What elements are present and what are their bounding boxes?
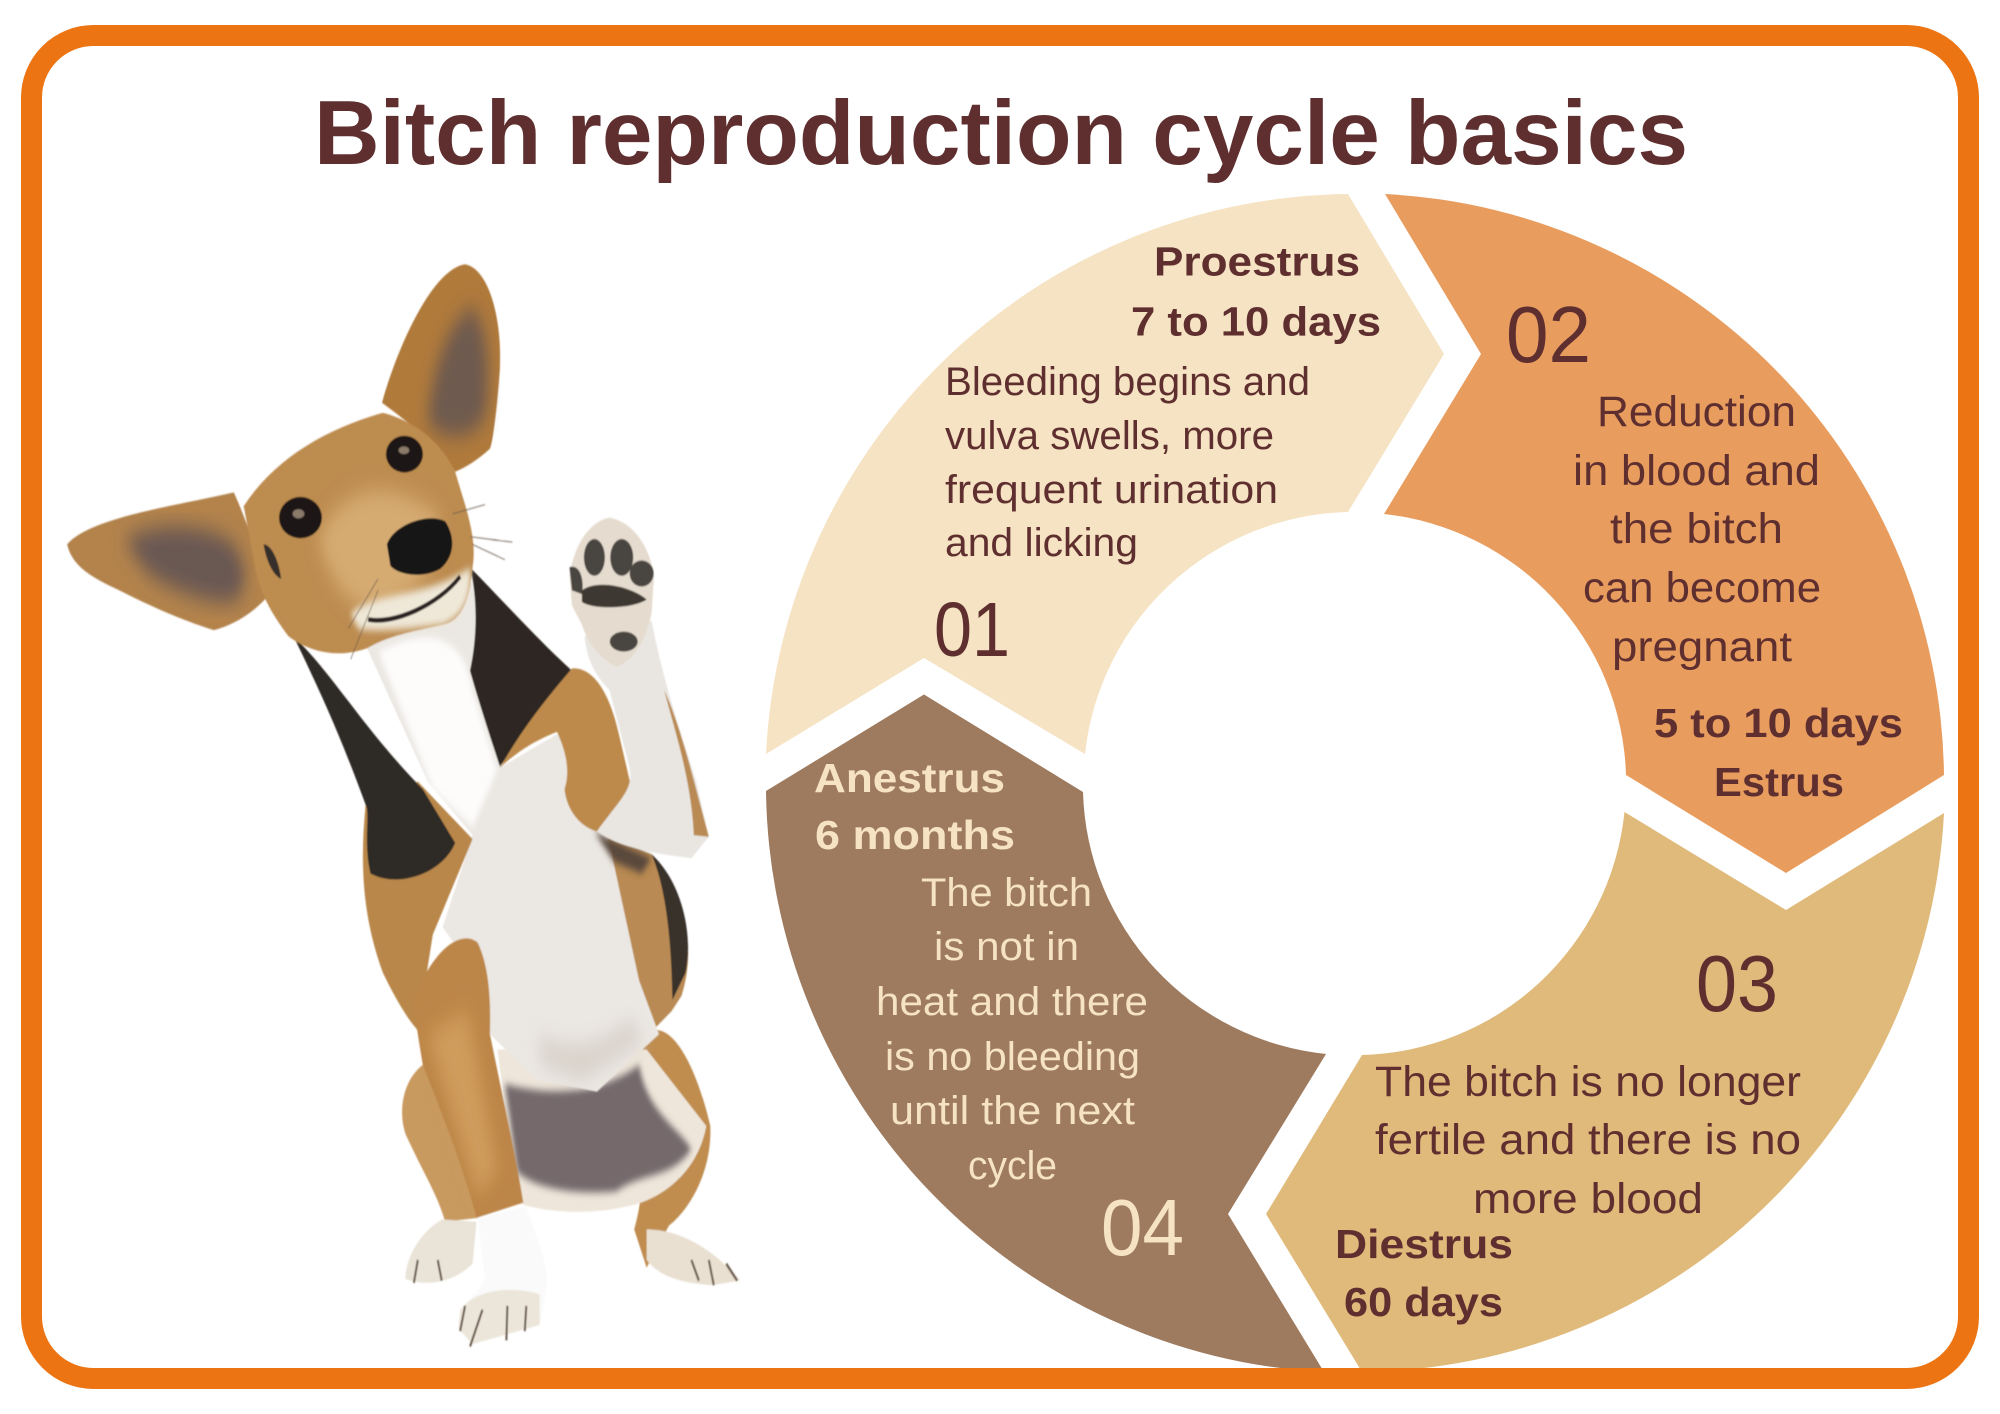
tan shoulder under black (500, 668, 632, 831)
segment 01 Proestrus: 01 (934, 587, 1010, 673)
paw (570, 518, 654, 667)
segment 02 Estrus: pregnant (1612, 623, 1792, 671)
mouth (368, 577, 460, 620)
segment 01 Proestrus: Proestrus (1154, 238, 1360, 284)
segment 04 Anestrus: 04 (1101, 1183, 1184, 1272)
far rear leg (634, 1030, 710, 1268)
raised leg (570, 518, 709, 858)
head (244, 413, 474, 653)
segment 03 Diestrus (1266, 812, 1944, 1372)
segment 04 Anestrus: heat and there (876, 980, 1148, 1024)
segment 03 Diestrus: The bitch is no longer (1375, 1058, 1801, 1106)
whiskers (348, 505, 512, 659)
segment 04 Anestrus: cycle (968, 1144, 1057, 1188)
segment 02 Estrus: Estrus (1714, 759, 1844, 805)
segment 02 Estrus: the bitch (1610, 505, 1783, 553)
segment 03 Diestrus: 60 days (1344, 1279, 1503, 1325)
segment 04 Anestrus: is not in (934, 925, 1079, 969)
front white foot (460, 1206, 547, 1342)
front leg (413, 938, 523, 1218)
segment 01 Proestrus: vulva swells, more (945, 414, 1274, 458)
segment 04 Anestrus: The bitch (921, 871, 1092, 915)
rear back (604, 835, 688, 1042)
segment 02 Estrus: 5 to 10 days (1654, 700, 1903, 746)
nose (387, 518, 452, 575)
segment 02 Estrus: 02 (1506, 290, 1591, 379)
shadow under raised leg (594, 831, 652, 873)
segment 04 Anestrus: Anestrus (814, 755, 1005, 801)
right eye (386, 436, 423, 472)
right ear (382, 264, 500, 472)
belly underside (497, 1049, 706, 1212)
black neck patch (293, 636, 455, 879)
segment 02 Estrus: in blood and (1573, 447, 1820, 495)
segment 03 Diestrus: 03 (1696, 939, 1778, 1028)
left shoulder (363, 782, 473, 1030)
near-side rear leg (402, 1065, 478, 1222)
upper back black (470, 567, 572, 766)
segment 01 Proestrus: and licking (945, 521, 1138, 565)
segment 02 Estrus: can become (1583, 564, 1821, 612)
segment 01 Proestrus: 7 to 10 days (1131, 298, 1381, 344)
segment 04 Anestrus: is no bleeding (885, 1035, 1140, 1079)
icon: dog raising paw (67, 264, 740, 1346)
segment 04 Anestrus: until the next (890, 1089, 1135, 1133)
segment 03 Diestrus: Diestrus (1335, 1221, 1513, 1267)
title: Bitch reproduction cycle basics (314, 83, 1688, 184)
segment 01 Proestrus: Bleeding begins and (945, 360, 1310, 404)
segment 04 Anestrus: 6 months (815, 812, 1015, 858)
segment 01 Proestrus: frequent urination (945, 468, 1278, 512)
left eye (279, 497, 322, 538)
segment 03 Diestrus: fertile and there is no (1375, 1116, 1801, 1164)
segment 02 Estrus (1384, 194, 1944, 873)
panel: cycle ring (766, 194, 1944, 1372)
torso white (358, 583, 659, 1092)
segment 03 Diestrus: more blood (1473, 1175, 1703, 1223)
segment 01 Proestrus (766, 194, 1444, 754)
segment 04 Anestrus (766, 694, 1326, 1372)
segment 02 Estrus: Reduction (1597, 388, 1796, 436)
paw claws (414, 1260, 737, 1346)
left ear (67, 492, 270, 630)
